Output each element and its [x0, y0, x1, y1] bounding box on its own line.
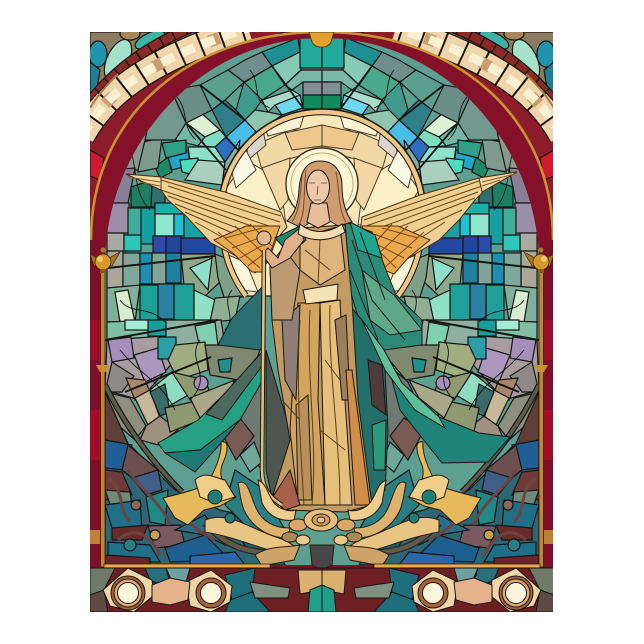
cloak: right drape [345, 222, 510, 507]
hair [287, 161, 352, 228]
panel: halo arch [218, 109, 426, 296]
panel: angel figure [158, 161, 510, 512]
halo glass cells [225, 112, 419, 292]
neck [307, 203, 330, 228]
facial features [309, 183, 327, 200]
lamp finial [90, 248, 120, 273]
rose [304, 509, 338, 531]
staff [262, 250, 282, 505]
staff inner colour [262, 250, 282, 505]
robe [270, 225, 372, 512]
bottom strip cells [90, 568, 322, 612]
panel: mosaic background [100, 30, 544, 570]
head halo [286, 148, 358, 220]
lattice: lower left behind staff [266, 350, 292, 498]
shoulder sleeve: green [274, 226, 307, 246]
wing: right [360, 172, 517, 274]
center shield [310, 545, 334, 570]
frame: side columns and bottom strip [90, 240, 554, 612]
cloak: left drape [158, 285, 264, 472]
print sheet [82, 27, 562, 612]
mosaic left half [105, 38, 322, 565]
wing: left [126, 174, 287, 273]
hair strands [292, 170, 346, 226]
crown ornament: top centre [309, 32, 334, 47]
panel: gold ornament [163, 442, 481, 570]
arm and hand [257, 228, 304, 268]
panel: top corner spandrels [82, 27, 562, 240]
collar [298, 224, 345, 240]
face [306, 170, 330, 204]
arch: red band with gold line [91, 32, 553, 612]
